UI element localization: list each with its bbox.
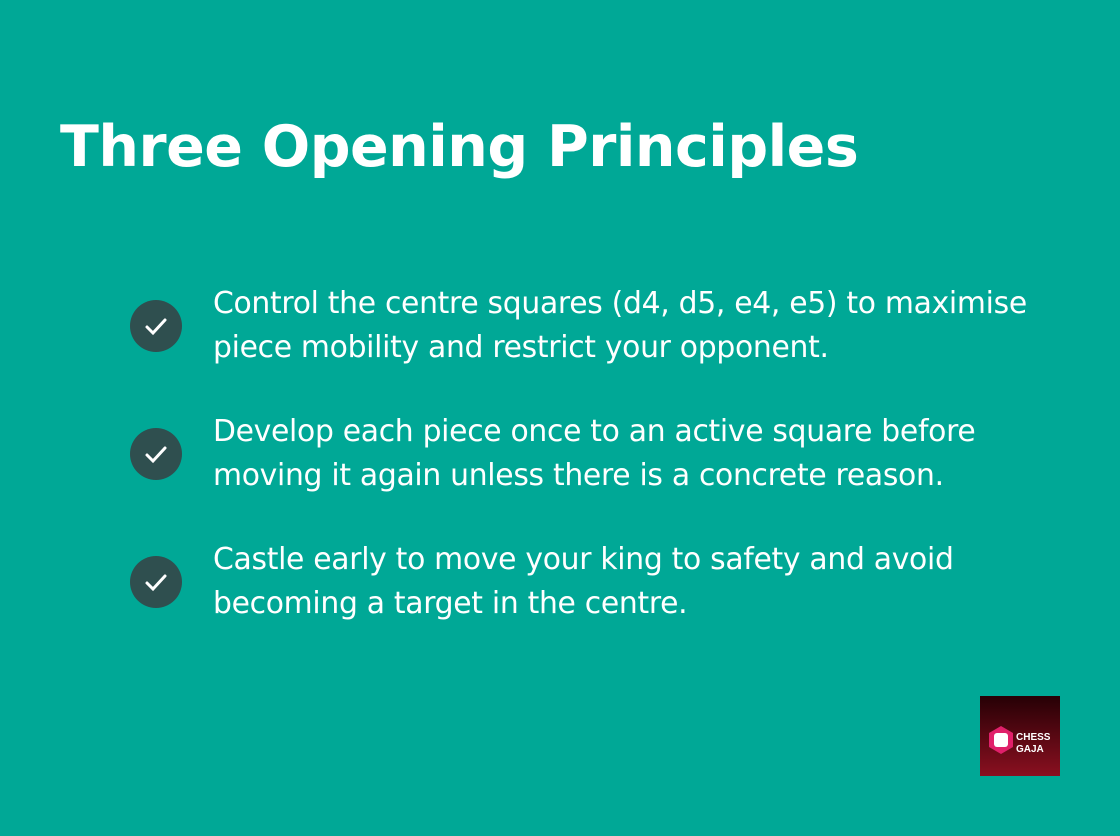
logo bbox=[980, 696, 1060, 776]
text: development bbox=[213, 414, 975, 493]
icon: check bbox=[130, 428, 182, 480]
text: centre control bbox=[213, 286, 1027, 365]
item: castle bbox=[130, 542, 954, 621]
title: Three Opening Principles bbox=[60, 114, 858, 180]
text: castle: becoming a target in the centre. bbox=[213, 586, 687, 621]
text: castle bbox=[213, 542, 954, 621]
item: development bbox=[130, 414, 975, 493]
text: centre control: Control the centre squares (d4, d5, e4, e5) to maximise bbox=[213, 286, 1027, 321]
logo: CHESS bbox=[1016, 732, 1051, 743]
icon: check bbox=[130, 556, 182, 608]
icon: check bbox=[130, 300, 182, 352]
text: centre control: piece mobility and restrict your opponent. bbox=[213, 330, 829, 365]
text: castle: Castle early to move your king to safety and avoid bbox=[213, 542, 954, 577]
text: development: moving it again unless there is a concrete reason. bbox=[213, 458, 944, 493]
text: development: Develop each piece once to an active square before bbox=[213, 414, 975, 449]
logo: GAJA bbox=[1016, 744, 1044, 755]
item: centre control bbox=[130, 286, 1027, 365]
